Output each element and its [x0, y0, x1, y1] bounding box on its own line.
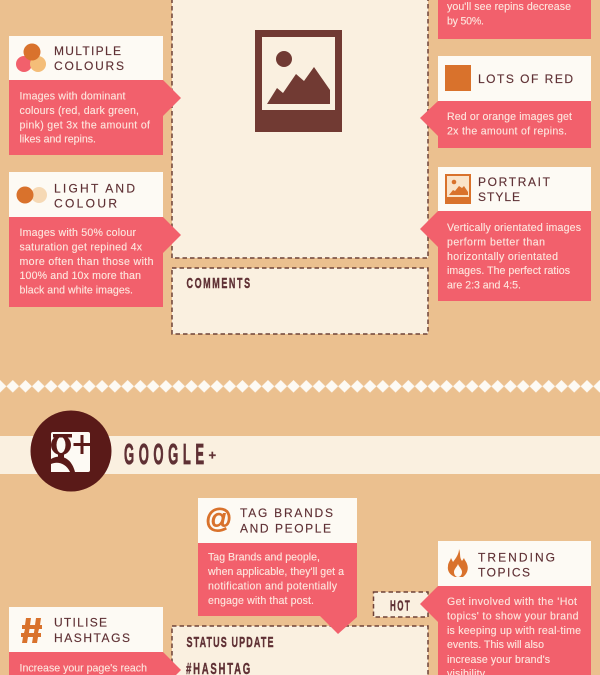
text: portrait style: horizontally orientated: [447, 251, 558, 263]
card: lots of red: [420, 56, 591, 148]
icon: two circles: [16, 186, 47, 204]
heading: google+: GOOGLE: [124, 438, 204, 470]
heading: utilise hashtags: [54, 616, 130, 645]
heading: light and colour: [54, 182, 135, 210]
text: repins decrease: by 50%.: [447, 16, 484, 28]
heading: trending topics: [478, 551, 555, 580]
text: portrait style: are 2:3 and 4:5.: [447, 280, 521, 292]
text: light and colour: more often than those with: [20, 256, 154, 268]
heading: portrait style: [478, 175, 551, 204]
text: lots of red: [447, 111, 572, 138]
icon: flame: [448, 549, 468, 577]
heading: portrait style: PORTRAIT: [478, 175, 551, 189]
panel: status update: [172, 626, 428, 675]
heading: portrait style: STYLE: [478, 190, 520, 204]
card: utilise hashtags: [9, 607, 181, 675]
text: repins decrease: [447, 1, 571, 28]
tag: hot: [374, 592, 428, 617]
text: multiple colours: [20, 90, 150, 146]
icon: hash: [21, 618, 42, 643]
text: light and colour: 100% and 10x more than: [20, 270, 141, 282]
icon: orange square: [445, 65, 471, 91]
heading: multiple colours: MULTIPLE: [54, 44, 121, 58]
text: portrait style: Vertically orientated images: [447, 222, 581, 234]
heading: tag brands: [240, 506, 333, 536]
text: portrait style: images. The perfect ratios: [447, 265, 570, 277]
text: multiple colours: pink) get 3x the amount of: [20, 119, 150, 131]
heading: light and colour: COLOUR: [54, 196, 117, 210]
text: light and colour: black and white images.: [20, 284, 133, 296]
panel: comments: [172, 268, 428, 334]
heading: utilise hashtags: HASHTAGS: [54, 631, 130, 645]
tag: hot: HOT: [390, 598, 410, 614]
label: comments: COMMENTS: [186, 275, 250, 292]
text: lots of red: 2x the amount of repins.: [447, 126, 567, 138]
heading: tag brands: TAG BRANDS: [240, 506, 333, 520]
text: trending topics: topics' to show your brand: [447, 610, 579, 622]
heading: trending topics: TOPICS: [478, 566, 530, 580]
text: portrait style: perform better than: [447, 236, 545, 248]
icon: three circles: [16, 44, 46, 72]
heading: utilise hashtags: UTILISE: [54, 616, 107, 630]
text: trending topics: Get involved with the 'Hot: [447, 596, 577, 608]
text: utilise hashtags: Increase your page's reach: [20, 663, 147, 675]
card: top right remainder: [438, 0, 591, 39]
text: trending topics: is keeping up with real-time: [447, 625, 581, 637]
text: multiple colours: colours (red, dark green,: [20, 105, 139, 117]
icon: at sign: @: [205, 504, 232, 534]
heading: google+: +: [208, 448, 216, 462]
divider: diamond row: [0, 380, 600, 393]
heading: lots of red: LOTS OF RED: [478, 72, 573, 86]
card: tag brands: [198, 498, 357, 634]
text: trending topics: [447, 596, 581, 675]
icon: google plus: [51, 432, 90, 472]
section banner: google+: [0, 410, 600, 492]
card: light and colour: [9, 172, 181, 307]
text: tag brands: engage with that post.: [208, 595, 314, 607]
text: multiple colours: Images with dominant: [20, 90, 126, 102]
heading: light and colour: LIGHT AND: [54, 182, 135, 196]
text: tag brands: notification and potentially: [208, 580, 338, 592]
panel: image post: [172, 0, 428, 258]
heading: trending topics: TRENDING: [478, 551, 555, 565]
text: light and colour: saturation get repined 4x: [20, 242, 143, 254]
icon: portrait picture: [445, 174, 471, 204]
text: multiple colours: likes and repins.: [20, 134, 96, 146]
text: trending topics: increase your brand's: [447, 654, 550, 666]
text: tag brands: when applicable, they'll get a: [207, 566, 344, 578]
text: tag brands: Tag Brands and people,: [208, 552, 320, 564]
heading: multiple colours: [54, 44, 124, 73]
card: multiple colours: [9, 36, 181, 155]
card: portrait style: [420, 167, 591, 301]
text: trending topics: events. This will also: [447, 639, 544, 651]
text: repins decrease: you'll see repins decrease: [447, 1, 571, 13]
card: trending topics: [420, 541, 591, 675]
text: light and colour: Images with 50% colour: [20, 227, 136, 239]
text: light and colour: [20, 227, 154, 296]
text: lots of red: Red or orange images get: [447, 111, 572, 123]
icon: picture frame: [255, 30, 342, 132]
text: tag brands: [207, 552, 344, 607]
text: portrait style: [447, 222, 581, 292]
label: status update: STATUS UPDATE: [186, 634, 274, 651]
heading: multiple colours: COLOURS: [54, 59, 124, 73]
heading: tag brands: AND PEOPLE: [240, 522, 331, 536]
